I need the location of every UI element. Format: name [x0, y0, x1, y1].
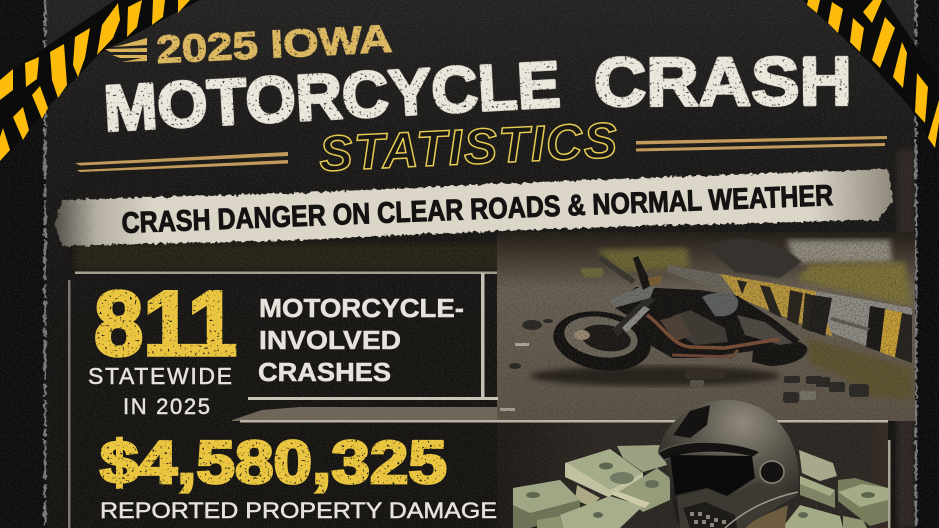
panel: 811 frame: [68, 272, 890, 528]
hazard tape: top left: [0, 0, 200, 163]
rear guard rail edge: [597, 256, 636, 284]
engine: [672, 310, 728, 345]
visor: [670, 455, 755, 496]
chin guard: [677, 482, 797, 528]
scarf: [745, 505, 788, 528]
stat: 811 crashes: [88, 273, 464, 419]
subtitle text: CRASH DANGER ON CLEAR ROADS & NORMAL WEATHER: [121, 179, 834, 240]
dark dome reflection: [673, 405, 710, 438]
big number 811: 811: [94, 273, 237, 375]
title: Statistics: STATISTICS: [318, 112, 618, 182]
label: motorcycle-involved crashes: [258, 295, 464, 387]
title: [102, 18, 852, 182]
helmet visor brim: [658, 442, 760, 460]
title: Crash: CRASH: [594, 43, 852, 121]
subtitle banner: [55, 169, 893, 246]
rear wheel: [752, 340, 807, 366]
label: motorcycle-involved crashes: INVOLVED: [259, 327, 401, 355]
double rule right: [636, 136, 887, 152]
body mass: [612, 287, 800, 358]
stat: property damage: [100, 429, 497, 523]
label: motorcycle-involved crashes: CRASHES: [258, 359, 391, 387]
road rubble: [500, 319, 869, 411]
money stacks: [513, 445, 888, 528]
title: 2025 Iowa: 2025 IOWA: [155, 18, 393, 72]
hazard tape: top right: [803, 0, 939, 150]
label: statewide in 2025: IN 2025: [123, 394, 210, 419]
label: reported property damage: REPORTED PROPERTY DAMAGE: [100, 498, 497, 523]
front forks: [612, 295, 655, 336]
handlebar: [633, 256, 652, 290]
rear mudguard: [737, 315, 793, 345]
big number damage: $4,580,325: [100, 429, 447, 496]
double rule left: [75, 152, 288, 172]
right stacks: [782, 450, 888, 528]
label: statewide in 2025: STATEWIDE: [88, 363, 232, 389]
label: statewide in 2025: [88, 363, 232, 419]
crash scene photo: [497, 232, 915, 421]
guardrail: [668, 265, 912, 363]
broken debris panel: [706, 239, 802, 278]
helmet: [658, 400, 799, 528]
side goggle clip: [760, 461, 784, 483]
grass verge: [580, 240, 912, 400]
motorcycle: [530, 256, 807, 386]
left stacks: [513, 445, 670, 528]
label: motorcycle-involved crashes: MOTORCYCLE-: [259, 295, 464, 323]
front wheel: [549, 305, 655, 377]
title: Motorcycle: MOTORCYCLE: [102, 47, 562, 145]
fender: [610, 286, 655, 308]
tank: [702, 293, 738, 316]
exhaust: [647, 315, 780, 348]
speed lines icon: [105, 38, 147, 62]
